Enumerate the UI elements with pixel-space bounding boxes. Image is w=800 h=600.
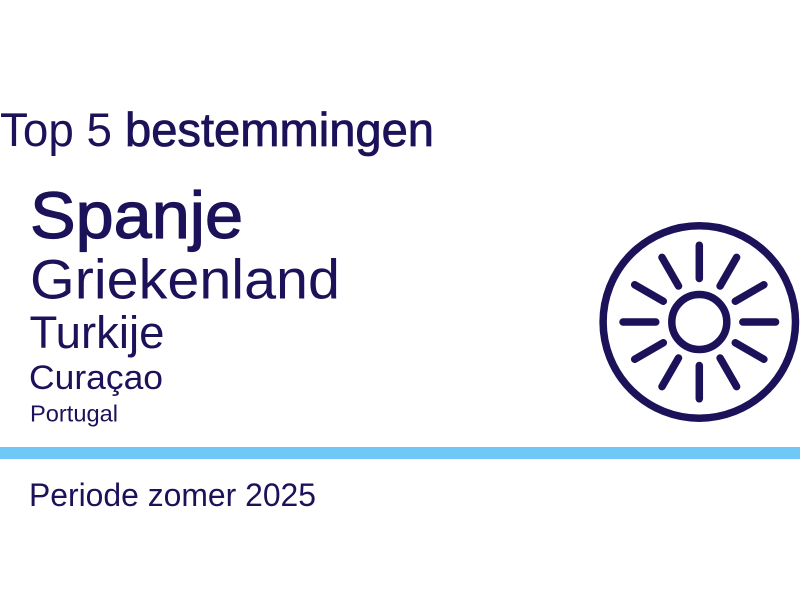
title: Top 5 [0, 103, 112, 156]
destination 5: Portugal: Portugal [30, 400, 118, 426]
destination 4: Curaçao: Curaçao [29, 359, 163, 397]
divider bar [0, 447, 800, 459]
destination list [29, 178, 340, 426]
destination 3: Turkije: Turkije [30, 307, 164, 358]
destination 1: Spanje: Spanje [30, 178, 243, 252]
destination 2: Griekenland: Griekenland [30, 248, 340, 310]
period label: Periode zomer 2025 [29, 477, 316, 513]
title: bestemmingen [125, 103, 434, 156]
icon: sun in circle [603, 226, 796, 418]
